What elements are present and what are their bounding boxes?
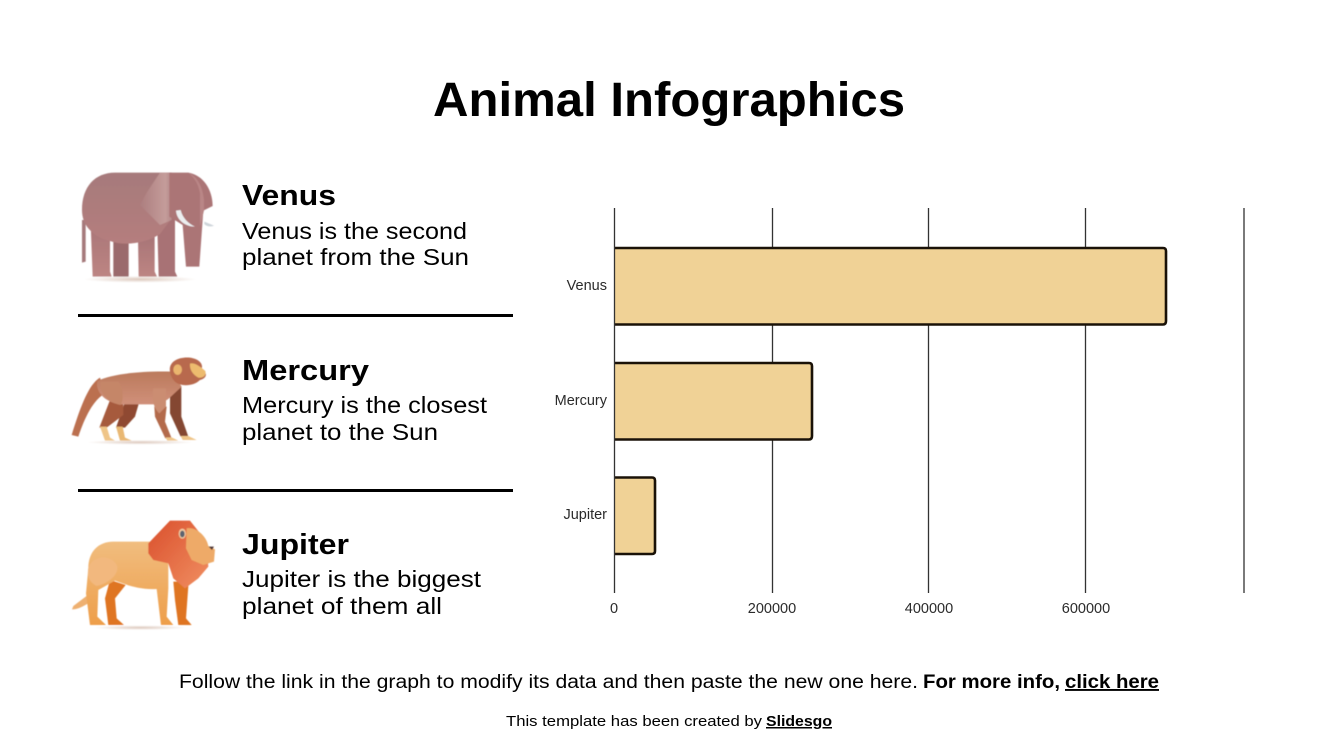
footnote: For more info, [923,672,1060,693]
credit line: Slidesgo [766,713,832,730]
footnote: Follow the link in the graph to modify its data and then paste the new one here. [179,672,918,693]
text: mercury description: Mercury is the closest [242,392,488,418]
heading: jupiter: Jupiter [242,529,349,561]
text: venus description [242,218,469,270]
credit line: This template has been created by [506,713,763,730]
axis labels: values: 200000 [748,601,796,617]
bar: mercury [614,363,812,440]
panel: jupiter [72,521,482,630]
icon: monkey [72,358,206,445]
text: jupiter description: Jupiter is the biggest [242,566,482,592]
bar: venus [614,248,1166,324]
panel: mercury [72,355,488,445]
text: venus description: planet from the Sun [242,244,469,270]
heading: mercury: Mercury [242,355,369,387]
axis labels: categories: Venus [567,278,607,294]
icon: elephant [82,173,214,283]
axis labels: categories: Mercury [555,393,608,409]
title: Animal Infographics [433,74,905,127]
heading: venus: Venus [242,180,336,212]
axis labels: values: 0 [610,601,618,617]
text: mercury description: planet to the Sun [242,419,438,445]
axis labels: categories: Jupiter [563,507,607,523]
text: jupiter description [242,566,482,619]
bar: jupiter [614,478,655,554]
bar chart [555,208,1244,617]
axis labels: values [610,601,1110,617]
footnote: click here [1065,672,1159,693]
axis labels: values: 600000 [1062,601,1110,617]
axis labels: categories [555,278,608,523]
axis labels: values: 400000 [905,601,953,617]
icon: lion [72,521,215,630]
footnote [179,672,1159,693]
panel: venus [82,173,469,283]
text: jupiter description: planet of them all [242,593,442,619]
text: mercury description [242,392,488,445]
text: venus description: Venus is the second [242,218,467,244]
